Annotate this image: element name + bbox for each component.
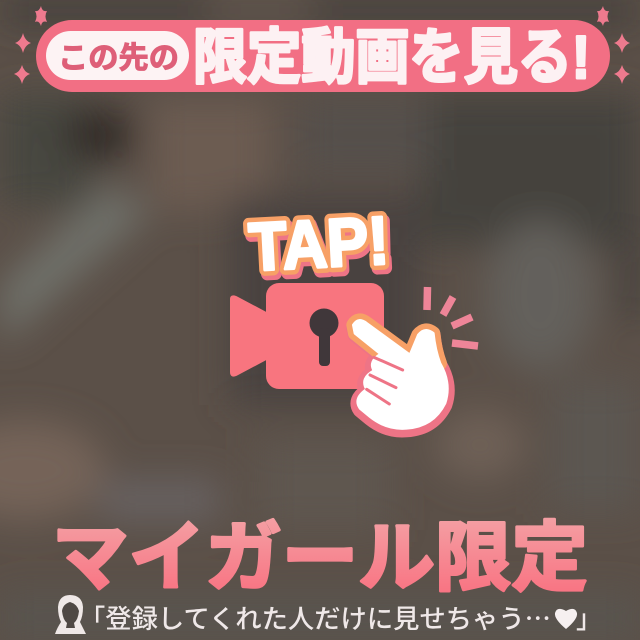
quote caption: 」 [576, 599, 602, 636]
icon: tap rays [427, 287, 478, 346]
quote caption: 「登録してくれた人だけに見せちゃう… [79, 599, 551, 636]
badge: この先の [46, 31, 189, 80]
TAP label: TAP! [247, 202, 391, 286]
banner heading: 限定動画を見る! [193, 24, 590, 91]
icon: woman silhouette [55, 595, 86, 634]
icon: locked video camera [231, 283, 384, 389]
icon: keyhole [310, 308, 338, 366]
sparkles [14, 6, 630, 84]
bottom title: マイガール限定 [52, 516, 588, 601]
TAP label: TAP! [247, 202, 391, 286]
icon: tapping hand [353, 320, 447, 430]
icon: heart [555, 609, 577, 629]
TAP label: TAP! [249, 206, 393, 290]
badge: この先の: この先の [58, 42, 179, 75]
banner pill [36, 20, 610, 92]
